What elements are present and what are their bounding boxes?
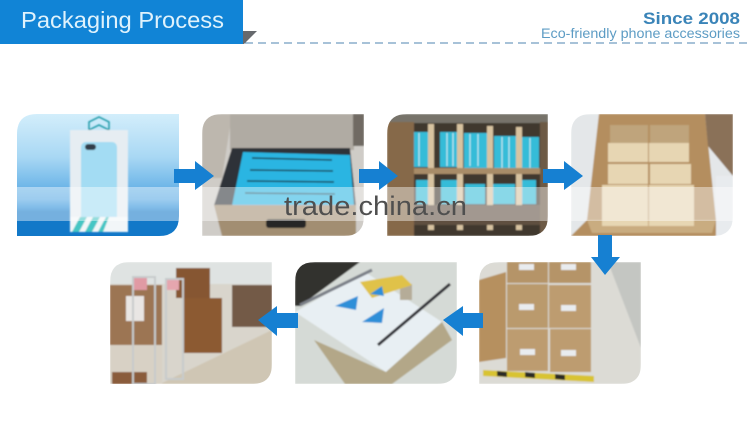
panel 6: transport test machine bbox=[295, 262, 457, 384]
title: Packaging Process bbox=[21, 7, 224, 33]
panel 2: open box with blue packages bbox=[202, 114, 364, 236]
panel 7: warehouse bbox=[110, 262, 272, 384]
arrow: step 3 to 4 bbox=[543, 161, 583, 190]
panel 5: stacked cartons on floor bbox=[479, 262, 641, 384]
panel 3: divided box bbox=[387, 114, 548, 236]
watermark band bbox=[14, 187, 736, 221]
arrow: step 5 to 6 bbox=[443, 306, 483, 336]
arrow: step 1 to 2 bbox=[174, 161, 214, 190]
panel 4: box of cartons bbox=[571, 114, 733, 236]
tagline: since 2008: Since 2008 bbox=[643, 9, 740, 28]
tagline: eco-friendly: Eco-friendly phone accessories bbox=[541, 26, 740, 41]
arrow: step 6 to 7 bbox=[258, 306, 298, 336]
arrow: step 2 to 3 bbox=[359, 161, 398, 190]
arrow: step 4 to 5 bbox=[591, 235, 620, 275]
panel 1: retail package bbox=[17, 114, 179, 236]
watermark text: trade.china.cn bbox=[284, 191, 467, 221]
header banner bbox=[0, 0, 750, 44]
